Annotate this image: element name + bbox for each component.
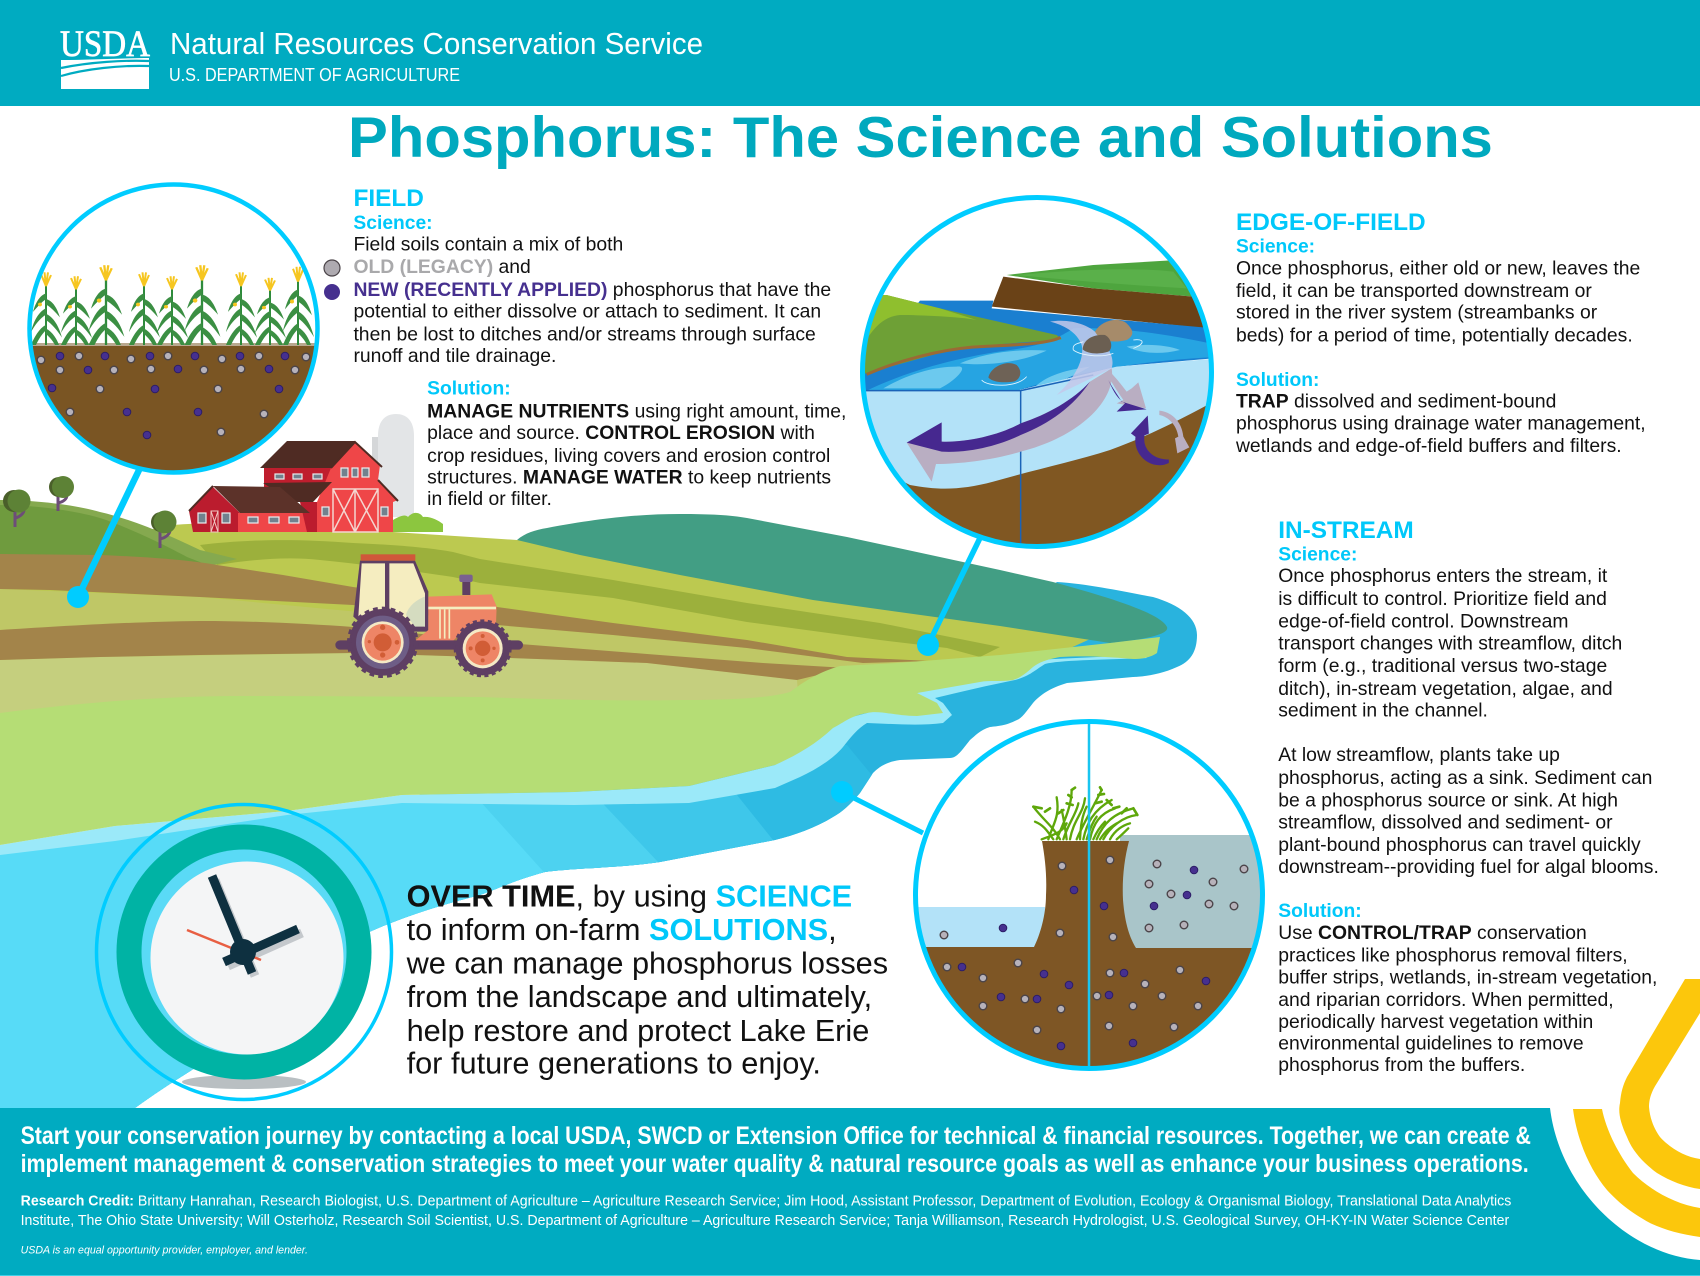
text: edge-of-field section bbox=[1235, 209, 1646, 457]
connector: in-stream circle to river bbox=[831, 781, 923, 833]
text: field section: then be lost to ditches and/or streams through surface bbox=[353, 323, 816, 345]
text: field section bbox=[353, 185, 846, 510]
rear wheel bbox=[349, 609, 416, 676]
text: edge-of-field section: wetlands and edge-of-field buffers and filters. bbox=[1235, 435, 1622, 457]
agency name: Natural Resources Conservation Service bbox=[170, 26, 703, 61]
title: Phosphorus: The Science and Solutions bbox=[348, 106, 1493, 170]
river and lake bbox=[0, 582, 1197, 1108]
text: equal opportunity statement: USDA is an equal opportunity provider, employer, and lender. bbox=[21, 1244, 308, 1256]
text: field section: structures. MANAGE WATER to keep nutrients bbox=[427, 467, 831, 489]
light blue water bbox=[918, 907, 1045, 947]
text: in-stream section: phosphorus, acting as a sink. Sediment can bbox=[1278, 767, 1652, 789]
USDA logo bbox=[60, 24, 150, 89]
text: in-stream section: environmental guidelines to remove bbox=[1278, 1032, 1584, 1054]
text: in-stream section: phosphorus from the buffers. bbox=[1278, 1054, 1525, 1076]
soil and berm bbox=[926, 841, 1252, 1066]
text: field section: place and source. CONTROL EROSION with bbox=[427, 422, 815, 444]
barn door bbox=[333, 489, 378, 532]
rocks bbox=[982, 320, 1142, 385]
text: field section: MANAGE NUTRIENTS using right amount, time, bbox=[427, 400, 846, 422]
pale olive strip bbox=[0, 589, 930, 700]
barn and silo bbox=[189, 414, 443, 532]
soil bbox=[905, 406, 1206, 544]
exhaust bbox=[462, 582, 470, 595]
cube edge lines bbox=[860, 375, 1093, 543]
clock face bbox=[150, 862, 344, 1054]
text: in-stream section: buffer strips, wetlands, in-stream vegetation, bbox=[1278, 966, 1657, 988]
far bank soil bbox=[992, 277, 1207, 328]
text: in-stream section: plant-bound phosphorus can travel quickly bbox=[1278, 834, 1641, 856]
text: in-stream section: ditch), in-stream vegetation, algae, and bbox=[1278, 678, 1613, 700]
text: in-stream section: Science: bbox=[1278, 545, 1357, 566]
text: edge-of-field section: Science: bbox=[1236, 237, 1315, 258]
text: edge-of-field section: phosphorus using drainage water management, bbox=[1236, 412, 1646, 434]
dark olive strip bbox=[200, 540, 1000, 657]
river surface bbox=[860, 301, 1213, 391]
grey water bbox=[1120, 835, 1270, 950]
sub-surface water bbox=[860, 358, 1220, 493]
grass bbox=[1033, 787, 1137, 839]
lower building bbox=[189, 487, 240, 532]
circle: edge-of-field stream cross-section bbox=[860, 198, 1220, 560]
text: field section: runoff and tile drainage. bbox=[353, 345, 556, 367]
upper roof bbox=[260, 441, 355, 468]
text: edge-of-field section: TRAP dissolved and sediment-bound bbox=[1236, 391, 1556, 413]
text: in-stream section: is difficult to control. Prioritize field and bbox=[1278, 588, 1607, 610]
text: over time message: help restore and protect Lake Erie bbox=[407, 1013, 869, 1048]
teal ring bbox=[116, 824, 372, 1080]
text: field section: potential to either dissolve or attach to sediment. It can bbox=[353, 301, 821, 323]
text: edge-of-field section: beds) for a period of time, potentially decades. bbox=[1236, 325, 1633, 347]
right barn body bbox=[317, 442, 398, 532]
legend dots bbox=[324, 260, 340, 300]
text: over time message: to inform on-farm SOLUTIONS, bbox=[407, 912, 837, 947]
landscape bbox=[0, 500, 1197, 1108]
text: research credit bbox=[21, 1194, 1511, 1229]
tractor bbox=[340, 554, 518, 676]
text: in-stream section: periodically harvest vegetation within bbox=[1278, 1011, 1593, 1033]
text: edge-of-field section: Once phosphorus, either old or new, leaves the bbox=[1236, 257, 1640, 279]
phosphorus particles bbox=[940, 856, 1248, 1050]
second brown furrow bbox=[0, 621, 847, 680]
text: field section: OLD (LEGACY) and bbox=[353, 256, 531, 278]
text: field section: Solution: bbox=[427, 379, 511, 400]
left dark green hill light edge bbox=[0, 500, 237, 570]
text: in-stream section: Use CONTROL/TRAP conservation bbox=[1278, 922, 1587, 944]
text: over time message bbox=[406, 878, 888, 1080]
text: field section: Science: bbox=[353, 213, 433, 234]
left dark green hill bbox=[0, 505, 210, 570]
text: in-stream section: practices like phosphorus removal filters, bbox=[1278, 945, 1628, 967]
pale foreground field bbox=[0, 653, 800, 730]
text: in-stream section: edge-of-field control. Downstream bbox=[1278, 611, 1569, 633]
text: in-stream section: downstream--providing fuel for algal blooms. bbox=[1278, 856, 1659, 878]
text: in-stream section: At low streamflow, plants take up bbox=[1278, 744, 1560, 766]
yellow outer arc bbox=[1573, 1109, 1700, 1237]
text: in-stream section: Solution: bbox=[1278, 901, 1362, 922]
clock hands bbox=[187, 876, 302, 976]
axle bbox=[340, 631, 518, 659]
text: over time message: OVER TIME, by using SCIENCE bbox=[407, 878, 852, 913]
text: edge-of-field section: field, it can be transported downstream or bbox=[1236, 280, 1592, 302]
connector: field circle to landscape bbox=[67, 468, 140, 608]
USDA logo: USDA bbox=[60, 24, 150, 65]
outer ring bbox=[96, 804, 392, 1100]
back hill bbox=[0, 523, 1110, 720]
text: field section: Field soils contain a mix of both bbox=[353, 233, 623, 255]
flow arrows bbox=[907, 321, 1189, 482]
circle: in-stream cross-section bbox=[910, 722, 1270, 1075]
hood bbox=[415, 594, 497, 641]
near bank edge bbox=[867, 337, 1061, 374]
near bank grass bbox=[860, 295, 1062, 375]
teal distant hill bbox=[517, 514, 1167, 643]
text: edge-of-field section: Solution: bbox=[1236, 370, 1319, 391]
barn windows bbox=[198, 468, 388, 523]
text: in-stream section: form (e.g., traditional versus two-stage bbox=[1278, 655, 1607, 677]
text: field section: crop residues, living covers and erosion control bbox=[427, 445, 830, 467]
bright green foreground field bbox=[0, 637, 1160, 845]
bush bbox=[393, 513, 443, 532]
header banner bbox=[0, 0, 1700, 106]
text: over time message: for future generations to enjoy. bbox=[407, 1045, 821, 1080]
text: in-stream section: and riparian corridors. When permitted, bbox=[1278, 989, 1614, 1011]
text: in-stream section: IN-STREAM bbox=[1278, 517, 1414, 544]
front wheel bbox=[456, 621, 510, 675]
cab bbox=[353, 561, 428, 632]
department name: U.S. DEPARTMENT OF AGRICULTURE bbox=[169, 65, 460, 85]
upper wall bbox=[264, 468, 332, 488]
text: in-stream section: be a phosphorus source or sink. At high bbox=[1278, 790, 1618, 812]
yellow drop arc bbox=[1619, 979, 1700, 1189]
text: field section: FIELD bbox=[353, 185, 424, 212]
divider line bbox=[1088, 722, 1090, 1068]
text: in-stream section: sediment in the channel. bbox=[1278, 700, 1488, 722]
clock bbox=[96, 804, 392, 1100]
connector: edge-of-field circle to landscape bbox=[917, 538, 980, 656]
text: in-stream section: streamflow, dissolved and sediment- or bbox=[1278, 811, 1613, 833]
text: field section: in field or filter. bbox=[427, 488, 552, 510]
phosphorus particles bbox=[37, 352, 310, 439]
text: over time message: from the landscape and ultimately, bbox=[407, 979, 872, 1014]
text: edge-of-field section: stored in the river system (streambanks or bbox=[1236, 302, 1598, 324]
first brown furrow bbox=[0, 554, 930, 663]
silo bbox=[372, 414, 414, 517]
text: in-stream section bbox=[1278, 517, 1659, 1076]
text: over time message: we can manage phosphorus losses bbox=[406, 946, 888, 981]
text: research credit: Research Credit: Brittany Hanrahan, Research Biologist, U.S. Department of Agriculture – Agriculture Research Service; Jim Hood, Assistant Professor, Department of Evolution, Ecology & Organismal Biology, Translational Data Analytics bbox=[21, 1194, 1511, 1210]
circle: field soil cross-section bbox=[25, 184, 325, 480]
footer white cut-out bbox=[1550, 1108, 1700, 1260]
text: in-stream section: transport changes with streamflow, ditch bbox=[1278, 632, 1622, 654]
corn plants bbox=[31, 265, 314, 345]
text: field section: NEW (RECENTLY APPLIED) phosphorus that have the bbox=[353, 279, 831, 301]
footer band bbox=[0, 979, 1700, 1276]
trees bbox=[3, 476, 176, 548]
text: research credit: Institute, The Ohio State University; Will Osterholz, Research Soil Scientist, U.S. Department of Agriculture – Agriculture Research Service; Tanja Williamson, Research Hydrologist, U.S. Geological Survey, OH-KY-IN Water Science Center bbox=[21, 1213, 1509, 1229]
text: footer call to action bbox=[21, 1122, 1531, 1178]
text: in-stream section: Once phosphorus enters the stream, it bbox=[1278, 565, 1608, 587]
far bank grass bbox=[1007, 260, 1192, 296]
light water edge band bbox=[0, 655, 1147, 855]
text: edge-of-field section: EDGE-OF-FIELD bbox=[1236, 209, 1426, 236]
clock shadow bbox=[182, 1075, 306, 1089]
